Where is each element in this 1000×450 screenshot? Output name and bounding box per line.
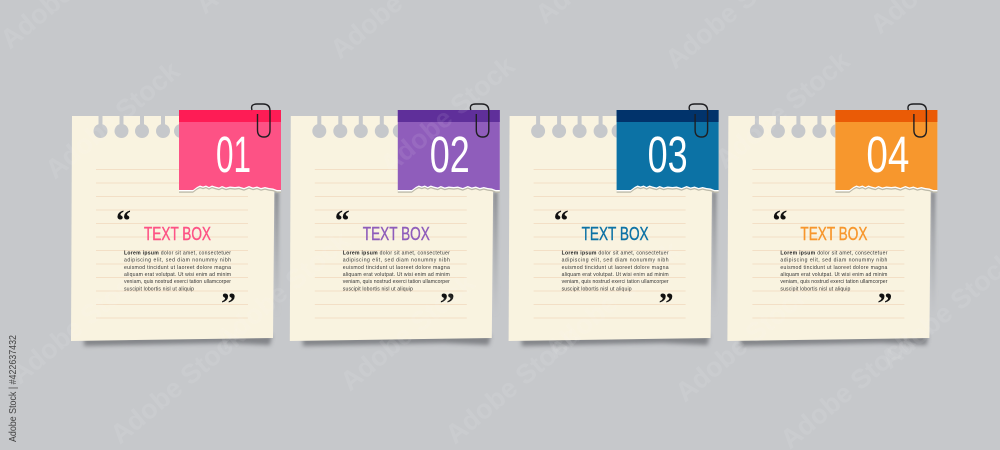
body text: veniam, quis nostrud exerci tation ullamcorper [124, 279, 231, 285]
body text: veniam, quis nostrud exerci tation ullamcorper [562, 279, 669, 285]
torn tag 02 [398, 110, 500, 193]
body text: veniam, quis nostrud exerci tation ullamcorper [343, 279, 450, 285]
body text: euismod tincidunt ut laoreet dolore magna [124, 265, 231, 271]
body text: suscipit lobortis nisl ut aliquip [124, 286, 194, 292]
heading: TEXT BOX [363, 223, 430, 244]
watermark: Adobe Stock [210, 225, 356, 355]
body text: suscipit lobortis nisl ut aliquip [343, 286, 413, 292]
body text: Lorem ipsum dolor sit amet, consectetuer [562, 250, 669, 256]
paper clip [470, 104, 489, 137]
opening quote: “ [772, 204, 787, 238]
torn tag 03 [617, 110, 719, 193]
body text: aliquam erat volutpat. Ut wisi enim ad minim [780, 272, 887, 278]
paper clip [689, 104, 708, 137]
number 03: 03 [648, 126, 688, 183]
torn tag 01 [179, 110, 281, 193]
watermark: Adobe Stock [540, 235, 686, 365]
opening quote: “ [335, 204, 350, 238]
watermark: Adobe Stock [40, 55, 186, 185]
closing quote: ” [877, 287, 892, 320]
body text: aliquam erat volutpat. Ut wisi enim ad minim [562, 272, 669, 278]
closing quote: ” [440, 287, 455, 320]
body text: suscipit lobortis nisl ut aliquip [780, 286, 851, 292]
number 02: 02 [430, 126, 470, 183]
number 04: 04 [866, 126, 909, 183]
body text [343, 250, 450, 292]
body text: euismod tincidunt ut laoreet dolore magna [343, 265, 450, 271]
watermark: Adobe Stock [335, 267, 481, 397]
body text [124, 250, 231, 292]
body text: suscipit lobortis nisl ut aliquip [562, 286, 632, 292]
panel: note 04 [727, 104, 937, 346]
opening quote: “ [554, 204, 569, 238]
watermark: Adobe Stock [375, 50, 521, 180]
paper clip [252, 104, 270, 137]
body text: euismod tincidunt ut laoreet dolore magna [562, 265, 669, 271]
body text: adipiscing elit, sed diam nonummy nibh [124, 258, 231, 264]
heading: TEXT BOX [800, 223, 867, 244]
watermark: Adobe Stock [710, 45, 856, 175]
paper clip [908, 104, 926, 137]
body text: aliquam erat volutpat. Ut wisi enim ad minim [124, 272, 231, 278]
closing quote: ” [221, 287, 236, 320]
number 01: 01 [216, 126, 251, 183]
body text [562, 250, 669, 292]
body text [780, 250, 888, 292]
paper sheet [290, 116, 494, 341]
binder holes [94, 115, 188, 138]
paper sheet [727, 116, 931, 341]
paper sheet [509, 116, 713, 341]
body text: adipiscing elit, sed diam nonummy nibh [780, 258, 888, 264]
closing quote: ” [659, 287, 674, 320]
body text: Lorem ipsum dolor sit amet, consectetuer [124, 250, 231, 256]
watermark: Adobe Stock [5, 260, 151, 390]
binder holes [312, 115, 407, 138]
paper sheet [71, 116, 275, 341]
panel: note 03 [509, 104, 719, 346]
body text: adipiscing elit, sed diam nonummy nibh [562, 258, 669, 264]
watermark: Adobe Stock [440, 320, 586, 450]
body text: euismod tincidunt ut laoreet dolore magna [780, 265, 888, 271]
stock id: Adobe Stock | #422637432 [8, 335, 19, 442]
binder holes [531, 115, 626, 138]
torn tag 04 [835, 110, 937, 193]
body text: Lorem ipsum dolor sit amet, consectetuer [780, 250, 888, 256]
binder holes [750, 115, 844, 138]
heading: TEXT BOX [582, 223, 649, 244]
watermark: Adobe Stock [105, 320, 251, 450]
panel: note 01 [71, 104, 281, 346]
heading: TEXT BOX [144, 223, 211, 244]
opening quote: “ [116, 204, 131, 238]
body text: aliquam erat volutpat. Ut wisi enim ad minim [343, 272, 450, 278]
watermark: Adobe Stock [670, 278, 816, 408]
body text: Lorem ipsum dolor sit amet, consectetuer [343, 250, 450, 256]
body text: adipiscing elit, sed diam nonummy nibh [343, 258, 450, 264]
panel: note 02 [290, 104, 500, 346]
body text: veniam, quis nostrud exerci tation ullamcorper [780, 279, 888, 285]
